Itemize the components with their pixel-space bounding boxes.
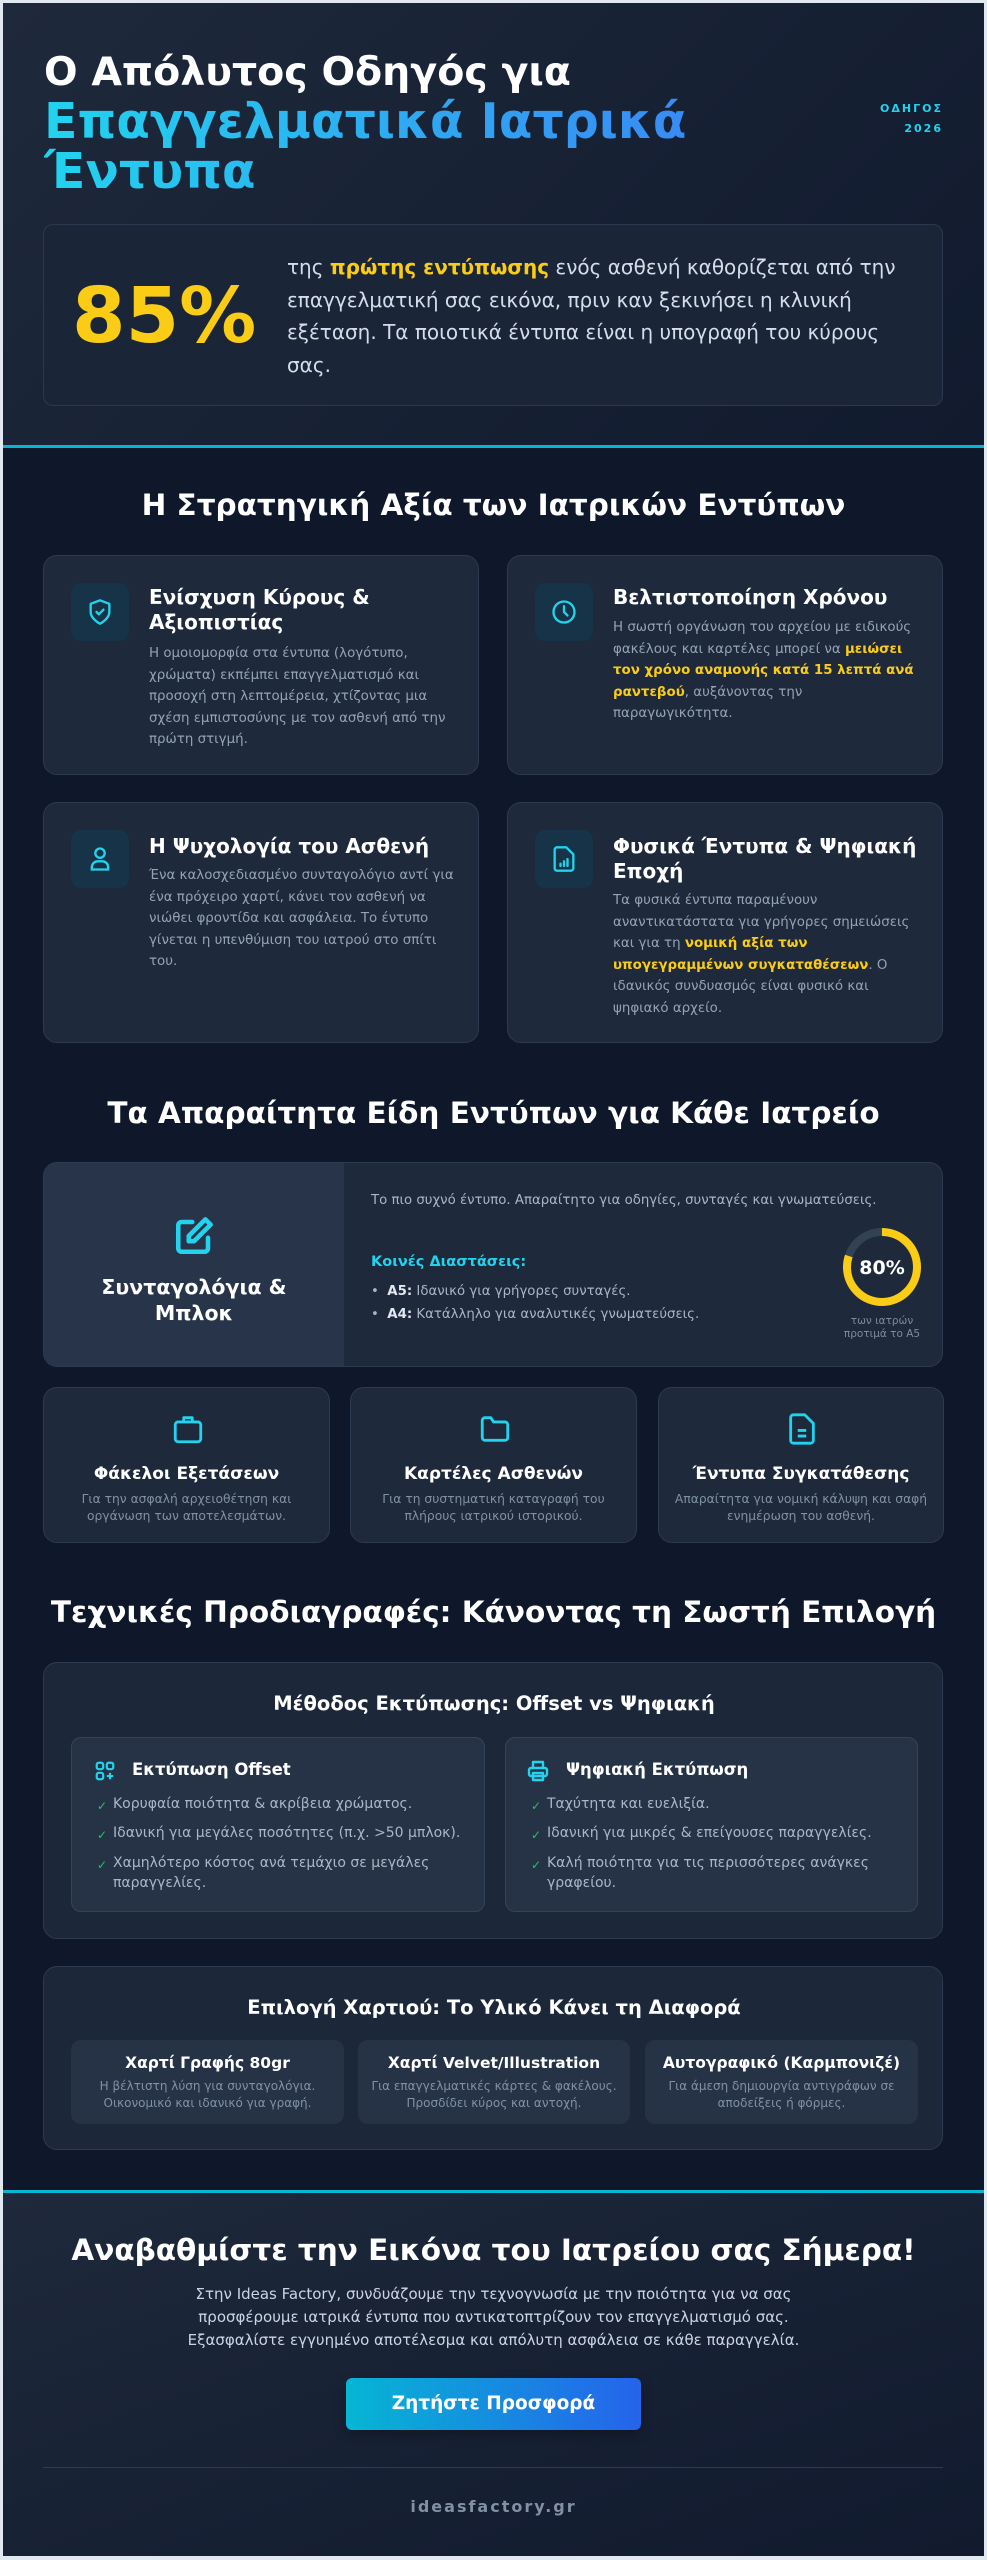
description: Το πιο συχνό έντυπο. Απαραίτητο για οδηγίες, συνταγές και γνωματεύσεις. <box>371 1193 877 1208</box>
card: consent forms <box>658 1387 944 1543</box>
dimensions heading: Κοινές Διαστάσεις: <box>371 1254 526 1270</box>
icon: grid <box>96 1762 114 1780</box>
card: digital: Ταχύτητα και ευελιξία. <box>547 1796 710 1812</box>
card body: Ένα καλοσχεδιασμένο συνταγολόγιο αντί για ένα πρόχειρο χαρτί, κάνει τον ασθενή να νιώθει φροντίδα και ασφάλεια. Το έντυπο γίνεται η υπενθύμιση του ιατρού στο σπίτι του. <box>149 868 454 969</box>
paper: velvet: Χαρτί Velvet/Illustration <box>388 2054 600 2072</box>
icon: shield <box>71 583 129 641</box>
heading: essential types: Τα Απαραίτητα Είδη Εντύπων για Κάθε Ιατρείο <box>107 1096 880 1130</box>
card: digital: Ψηφιακή Εκτύπωση <box>566 1760 748 1779</box>
card title: Φυσικά Έντυπα & Ψηφιακή Εποχή <box>613 834 916 883</box>
card title: Βελτιστοποίηση Χρόνου <box>613 585 887 609</box>
paper: writing: Η βέλτιστη λύση για συνταγολόγια. Οικονομικό και ιδανικό για γραφή. <box>100 2079 315 2110</box>
title: Επαγγελματικά Ιατρικά Έντυπα <box>44 93 686 200</box>
icon: clock <box>535 583 593 641</box>
big stat: 85% <box>72 272 256 361</box>
CTA text: προσφέρουμε ιατρικά έντυπα που αντικατοπτρίζουν τον επαγγελματισμό σας. <box>198 2308 789 2326</box>
card: physical & digital <box>507 802 943 1043</box>
icon: folder <box>480 1416 510 1442</box>
paper: writing: Χαρτί Γραφής 80gr <box>125 2054 290 2072</box>
icon: edit <box>176 1217 213 1254</box>
card: offset: ✓ <box>97 1828 107 1842</box>
card: offset: ✓ <box>97 1799 107 1813</box>
guide label <box>880 102 943 135</box>
heading: strategic value: Η Στρατηγική Αξία των Ιατρικών Εντύπων <box>142 488 845 522</box>
card: offset: Ιδανική για μεγάλες ποσότητες (π.χ. >50 μπλοκ). <box>113 1825 460 1841</box>
icon: briefcase <box>174 1416 202 1444</box>
card: offset <box>71 1737 485 1912</box>
card: patient cards: Καρτέλες Ασθενών <box>404 1464 583 1484</box>
title: Συνταγολόγια & <box>101 1275 287 1299</box>
card: prestige <box>43 555 479 775</box>
panel: prescription pads <box>43 1162 943 1367</box>
icon: document <box>789 1413 815 1445</box>
card: digital: Καλή ποιότητα για τις περισσότερες ανάγκες γραφείου. <box>547 1855 869 1891</box>
card title: Η Ψυχολογία του Ασθενή <box>149 834 429 858</box>
card: exam folders <box>43 1387 330 1543</box>
paper: carbonless: Για άμεση δημιουργία αντιγράφων σε αποδείξεις ή φόρμες. <box>668 2079 895 2110</box>
card: digital <box>505 1737 918 1912</box>
title <box>101 1275 287 1325</box>
icon: printer <box>528 1760 548 1782</box>
card: patient cards: Για τη συστηματική καταγραφή του πλήρους ιατρικού ιστορικού. <box>382 1492 605 1523</box>
footer url: ideasfactory.gr <box>410 2497 577 2516</box>
dimensions list <box>371 1284 699 1322</box>
card body: Τα φυσικά έντυπα παραμένουν αναντικατάστατα για γρήγορες σημειώσεις και για τη νομική αξία των υπογεγραμμένων συγκαταθέσεων. Ο ιδανικός συνδυασμός είναι φυσικό και ψηφιακό αρχείο. <box>613 893 909 1016</box>
CTA text: Εξασφαλίστε εγγυημένο αποτέλεσμα και απόλυτη ασφάλεια σε κάθε παραγγελία. <box>188 2331 799 2349</box>
card: consent forms: Έντυπα Συγκατάθεσης <box>693 1464 909 1484</box>
panel: prescription pads: προτιμά το A5 <box>844 1328 920 1340</box>
donut chart 80% <box>843 1228 921 1340</box>
button: Ζητήστε Προσφορά <box>392 2393 595 2414</box>
card title: Ενίσχυση Κύρους & Αξιοπιστίας <box>149 585 370 634</box>
guide label: 2026 <box>904 122 943 135</box>
CTA text: Στην Ideas Factory, συνδυάζουμε την τεχνογνωσία με την ποιότητα για να σας <box>196 2285 791 2303</box>
subtitle: Επιλογή Χαρτιού: Το Υλικό Κάνει τη Διαφορά <box>247 1996 741 2019</box>
CTA section <box>3 2193 984 2556</box>
stat text: της πρώτης εντύπωσης ενός ασθενή καθορίζεται από την επαγγελματική σας εικόνα, πριν καν ξεκινήσει η κλινική εξέταση. Τα ποιοτικά έντυπα είναι η υπογραφή του κύρους σας. <box>287 255 896 376</box>
panel: paper choice <box>43 1966 943 2150</box>
dimensions list: • A4: Κατάλληλο για αναλυτικές γνωματεύσεις. <box>371 1307 699 1322</box>
card: exam folders: Φάκελοι Εξετάσεων <box>94 1464 279 1484</box>
button <box>346 2378 641 2430</box>
CTA text <box>188 2285 799 2349</box>
card body: Η σωστή οργάνωση του αρχείου με ειδικούς φακέλους και καρτέλες μπορεί να μειώσει τον χρόνο αναμονής κατά 15 λεπτά ανά ραντεβού, αυξάνοντας την παραγωγικότητα. <box>613 620 914 721</box>
paper: carbonless <box>645 2040 918 2124</box>
guide label: ΟΔΗΓΟΣ <box>880 102 943 115</box>
header section <box>3 3 984 445</box>
icon: document chart <box>535 830 593 888</box>
card: digital: ✓ <box>531 1799 541 1813</box>
donut chart 80%: των ιατρών <box>851 1315 913 1327</box>
paper: carbonless: Αυτογραφικό (Καρμπονιζέ) <box>663 2054 900 2072</box>
card: consent forms: Απαραίτητα για νομική κάλυψη και σαφή ενημέρωση του ασθενή. <box>675 1492 927 1523</box>
icon: user <box>71 830 129 888</box>
donut chart 80%: 80% <box>859 1257 905 1279</box>
card: digital: ✓ <box>531 1828 541 1842</box>
card: exam folders: Για την ασφαλή αρχειοθέτηση και οργάνωση των αποτελεσμάτων. <box>82 1492 291 1523</box>
title: Μπλοκ <box>155 1301 233 1325</box>
card body: Η ομοιομορφία στα έντυπα (λογότυπο, χρώματα) εκπέμπει επαγγελματισμό και προσοχή στη λεπτομέρεια, χτίζοντας μια σχέση εμπιστοσύνης με τον ασθενή από την πρώτη στιγμή. <box>149 646 445 747</box>
card: digital: ✓ <box>531 1858 541 1872</box>
title: Ο Απόλυτος Οδηγός για <box>44 49 571 95</box>
card: time <box>507 555 943 775</box>
subtitle: Μέθοδος Εκτύπωσης: Offset vs Ψηφιακή <box>273 1692 715 1715</box>
card: psychology <box>43 802 479 1043</box>
card: offset: Εκτύπωση Offset <box>132 1760 291 1779</box>
paper: velvet <box>358 2040 630 2124</box>
paper: writing <box>71 2040 344 2124</box>
card: offset: ✓ <box>97 1858 107 1872</box>
CTA title: Αναβαθμίστε την Εικόνα του Ιατρείου σας Σήμερα! <box>71 2233 916 2267</box>
card: patient cards <box>350 1387 637 1543</box>
paper: velvet: Για επαγγελματικές κάρτες & φακέλους. Προσδίδει κύρος και αντοχή. <box>371 2079 617 2110</box>
dimensions list: • A5: Ιδανικό για γρήγορες συνταγές. <box>371 1284 631 1299</box>
panel: printing method <box>43 1662 943 1939</box>
heading: technical specs: Τεχνικές Προδιαγραφές: Κάνοντας τη Σωστή Επιλογή <box>51 1595 936 1629</box>
card: digital: Ιδανική για μικρές & επείγουσες παραγγελίες. <box>547 1825 872 1841</box>
left side <box>44 1163 344 1368</box>
card: offset: Χαμηλότερο κόστος ανά τεμάχιο σε μεγάλες παραγγελίες. <box>113 1855 429 1891</box>
stat box <box>43 224 943 406</box>
card: offset: Κορυφαία ποιότητα & ακρίβεια χρώματος. <box>113 1796 412 1812</box>
